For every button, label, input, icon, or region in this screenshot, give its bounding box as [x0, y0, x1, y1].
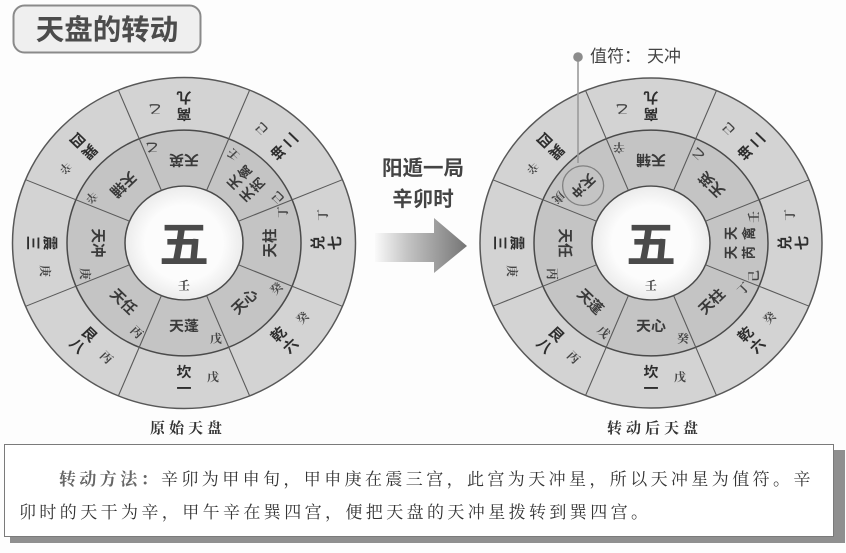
sector: right: [724, 209, 811, 282]
title badge: 天盘的转动: [36, 14, 178, 46]
sector: left: 丙: [545, 268, 559, 280]
sector: lower right: 丁: [734, 280, 753, 298]
sector: lower right: [695, 269, 791, 362]
sector: right: 禽: [741, 226, 757, 240]
sector: left: [491, 229, 573, 280]
sector: bottom: 一: [644, 382, 659, 397]
sector: lower left: 八: [66, 336, 88, 358]
sector: top: 天英: [169, 151, 199, 168]
sector: lower right: 天心: [228, 286, 262, 318]
sector: bottom: 天蓬: [169, 318, 199, 335]
title badge: [14, 6, 200, 52]
sector: left: 三: [24, 236, 40, 250]
sector: left: 三: [491, 236, 507, 250]
sector: right: 七: [327, 236, 344, 250]
sector: upper left with highlighted star: 庚: [549, 188, 568, 206]
arrow label: 阳遁一局: [382, 157, 464, 180]
sector: upper right: 天: [237, 184, 258, 204]
sector: right: 芮: [741, 246, 757, 259]
sector: upper right: 壬: [224, 145, 243, 163]
sector: left: 天冲: [89, 229, 106, 257]
sector: upper right: 己: [719, 119, 738, 137]
arrow label: [382, 157, 464, 211]
sector: bottom: 坎: [177, 363, 192, 381]
sector: right: 丁: [783, 209, 797, 221]
sector: upper right: 二: [280, 129, 302, 150]
sector: lower left: 艮: [545, 324, 567, 346]
sector: top: 乙: [616, 102, 628, 116]
center: five: 五: [159, 219, 209, 272]
sector: bottom: [169, 318, 222, 397]
sector: bottom: 戊: [674, 370, 686, 384]
sector: top: [146, 89, 199, 168]
sector: upper right: 坤: [267, 140, 290, 163]
caption: rotated plate: 转动后天盘: [607, 419, 702, 437]
sector: right: 丁: [316, 209, 330, 221]
sector: upper left: 四: [66, 129, 88, 150]
caption: original plate: 原始天盘: [150, 419, 226, 437]
sector: lower left: [527, 286, 623, 378]
sector: bottom: 戊: [207, 370, 219, 384]
sector: upper right: 己: [269, 188, 287, 206]
arrow label: 辛卯时: [392, 188, 454, 211]
sector: right: 七: [794, 236, 811, 250]
sector: left: [24, 229, 106, 280]
sector: left: 天任: [556, 229, 573, 258]
sector: upper left with highlighted star: [511, 124, 612, 222]
sector: right: 天: [724, 246, 739, 259]
center: five: 壬: [645, 279, 657, 292]
sector: upper right: [210, 109, 325, 220]
sector: right: 壬: [747, 211, 761, 223]
explanation panel: [4, 444, 845, 543]
sector: right: 兑: [776, 236, 794, 250]
sector: upper right: 乙: [689, 145, 708, 163]
sector: top: 乙: [149, 102, 161, 116]
wheel: rotated heaven plate: [480, 78, 822, 408]
sector: right: [261, 206, 344, 257]
sector: top: 天辅: [636, 151, 666, 169]
sector: lower left: 天任: [106, 286, 140, 318]
sector: lower left: 丙: [127, 323, 146, 341]
sector: upper right: 天: [224, 172, 245, 192]
sector: right: 己: [747, 270, 761, 282]
sector: lower left: [60, 286, 156, 378]
callout: zhifu pointer: 天冲: [647, 47, 681, 66]
center: five: 五: [626, 219, 676, 272]
sector: lower right: 六: [747, 335, 770, 357]
explanation panel: 转动方法：辛卯为甲申旬，甲申庚在震三宫，此宫为天冲星，所以天冲星为值符。辛: [59, 465, 814, 490]
explanation panel: 卯时的天干为辛，甲午辛在巽四宫，便把天盘的天冲星拨转到巽四宫。: [19, 498, 651, 523]
sector: upper right: 坤: [734, 140, 757, 163]
sector: top: 九: [643, 89, 658, 105]
sector: lower right: 癸: [760, 309, 779, 327]
sector: lower right: 天柱: [695, 285, 729, 318]
sector: lower left: 丙: [97, 349, 116, 367]
sector: lower left: 艮: [78, 324, 100, 346]
sector: top: 离: [644, 105, 658, 123]
sector: upper left with highlighted star: 辛: [523, 159, 542, 177]
sector: lower right: 乾: [734, 323, 758, 346]
sector: top: 离: [177, 105, 191, 123]
sector: bottom: 一: [177, 382, 192, 397]
sector: upper right: [679, 108, 775, 200]
sector: upper left: 巽: [77, 140, 100, 162]
sector: bottom: 坎: [644, 363, 659, 381]
sector: bottom: 戊: [210, 332, 222, 345]
sector: upper right: 禽: [234, 162, 255, 182]
sector: top: [613, 89, 666, 169]
sector: lower left: 戊: [594, 323, 613, 341]
sector: top: 九: [176, 89, 191, 105]
sector: upper left: [44, 124, 140, 217]
sector: lower left: 八: [533, 336, 555, 358]
sector: bottom: 癸: [677, 332, 689, 345]
sector: right: 兑: [309, 236, 327, 250]
sector: bottom: 天心: [636, 318, 666, 335]
sector: lower right: [228, 270, 324, 362]
sector: upper right: 二: [747, 129, 769, 150]
sector: left: 震: [508, 236, 525, 250]
sector: left: 庚: [78, 268, 92, 280]
sector: lower right: 乾: [267, 323, 291, 346]
sector: lower right: 癸: [293, 309, 312, 327]
sector: right: 天: [724, 226, 739, 240]
sector: right: 丁: [276, 206, 290, 218]
sector: lower right: 癸: [267, 280, 286, 298]
sector: right: 天柱: [261, 228, 279, 257]
sector: upper left with highlighted star: 四: [533, 129, 555, 150]
sector: upper right: 己: [252, 119, 271, 137]
sector: left: 震: [41, 236, 58, 250]
sector: lower left: 丙: [564, 349, 583, 367]
sector: upper right: 天英: [695, 168, 729, 200]
sector: upper left: 天辅: [106, 168, 140, 201]
sector: left: 庚: [505, 265, 519, 277]
sector: upper left: 辛: [56, 159, 75, 177]
callout: zhifu pointer: 值符：: [590, 47, 641, 66]
arrow: [375, 218, 467, 273]
sector: lower left: 天蓬: [573, 286, 607, 318]
sector: upper right: 芮: [247, 174, 268, 195]
center: five: 壬: [178, 279, 190, 292]
sector: bottom: [636, 318, 689, 397]
callout: zhifu pointer: [573, 47, 681, 163]
sector: upper left with highlighted star: 天冲: [568, 171, 598, 200]
sector: left: 庚: [38, 265, 52, 277]
sector: top: 辛: [613, 141, 625, 154]
sector: lower right: 六: [280, 335, 303, 357]
sector: top: 乙: [146, 141, 158, 154]
sector: upper left: 辛: [82, 188, 101, 206]
wheel: original heaven plate: [12, 78, 356, 408]
sector: upper left with highlighted star: 巽: [544, 140, 567, 162]
